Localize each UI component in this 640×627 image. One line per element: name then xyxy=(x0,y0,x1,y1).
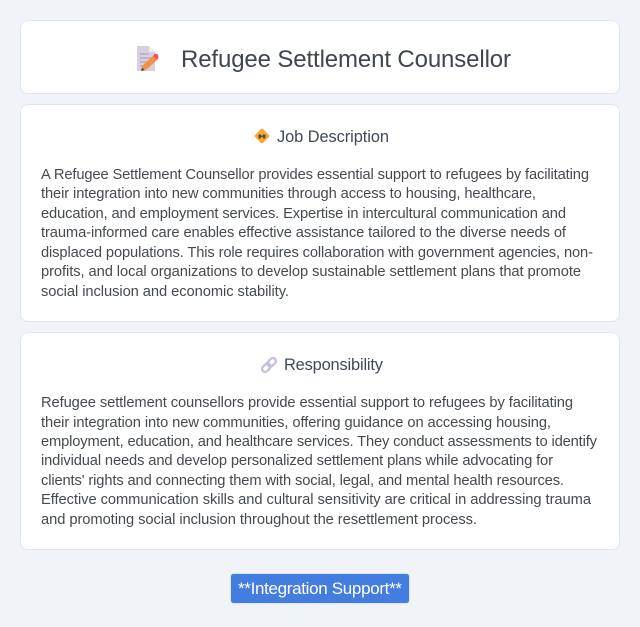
text block: responsibility: individual needs and develop personalized settlement plans while advocating for xyxy=(41,453,553,469)
text block: job description xyxy=(41,167,593,300)
heading: responsibility: Responsibility xyxy=(284,356,384,374)
text block: responsibility: and promoting social inclusion throughout the resettlement process. xyxy=(41,512,477,528)
button: integration support xyxy=(230,574,410,604)
text block: job description: their integration into new communities through access to housing, healthcare, xyxy=(41,186,536,202)
text block: responsibility xyxy=(41,395,598,528)
button: integration support: **Integration Support** xyxy=(238,579,402,598)
text block: job description: education, and employment services. Expertise in intercultural communication and xyxy=(41,206,566,222)
panel: title card xyxy=(20,20,620,94)
text block: responsibility: their integration into new communities, offering guidance on accessing housing, xyxy=(41,415,551,431)
icon: chain link xyxy=(261,357,277,373)
panel: responsibility card xyxy=(20,332,620,550)
title: Refugee Settlement Counsellor xyxy=(181,46,511,73)
icon: document with pencil xyxy=(137,46,158,71)
heading: job description: Job Description xyxy=(277,128,389,146)
text block: job description: profits, and local organizations to develop sustainable settlement plans that promote xyxy=(41,264,581,280)
text block: job description: displaced populations. This role requires collaboration with government agencies, non- xyxy=(41,245,593,261)
panel: job description card xyxy=(20,104,620,322)
text block: responsibility: Effective communication skills and cultural sensitivity are critical in addressing trauma xyxy=(41,492,592,508)
text block: job description: trauma-informed care enables effective assistance tailored to the diverse needs of xyxy=(41,225,567,241)
text block: responsibility: employment, education, and healthcare services. They conduct assessments to identify xyxy=(41,434,598,450)
text block: responsibility: Refugee settlement counsellors provide essential support to refugees by facilitating xyxy=(41,395,573,411)
text block: job description: A Refugee Settlement Counsellor provides essential support to refugees by facilitating xyxy=(41,167,589,183)
text block: responsibility: clients' rights and connecting them with social, legal, and mental health resources. xyxy=(41,473,564,489)
text block: job description: social inclusion and economic stability. xyxy=(41,284,289,300)
icon: diamond warning sign xyxy=(254,128,270,144)
